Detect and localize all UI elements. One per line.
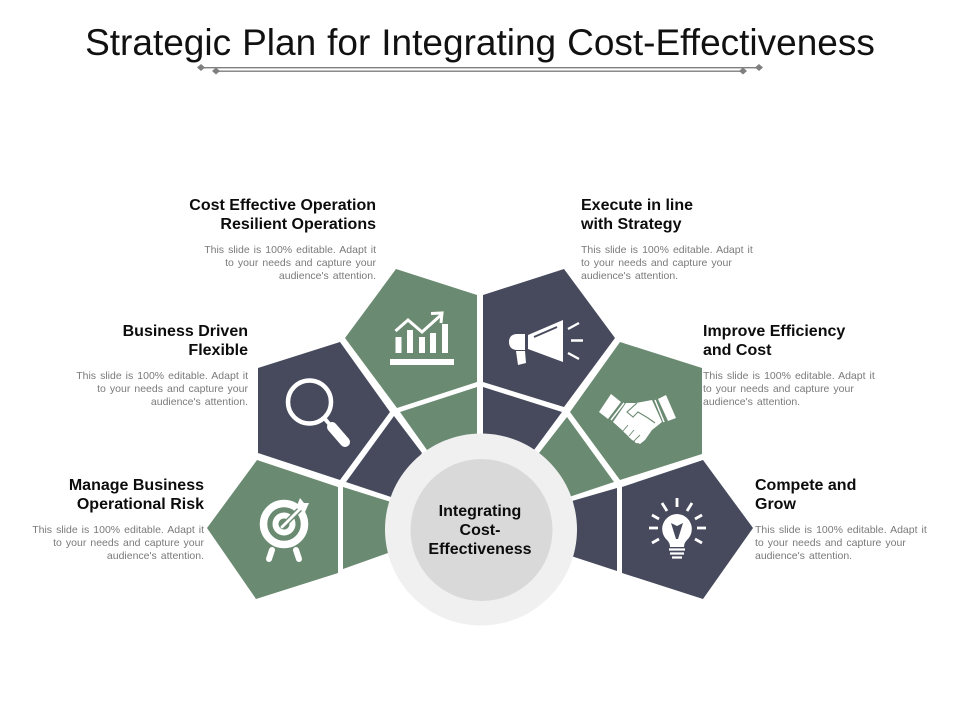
center label: Effectiveness (428, 541, 532, 558)
heading: cost effective operation: Cost Effective Operation (189, 197, 376, 214)
title underline ornament (197, 64, 763, 74)
description: This slide is 100% editable. Adapt it (32, 524, 204, 536)
heading: manage business: Manage Business (69, 477, 204, 494)
description: to your needs and capture your (755, 537, 906, 549)
description: audience's attention. (703, 396, 800, 408)
panel: manage business operational risk (32, 460, 391, 599)
description: This slide is 100% editable. Adapt it (581, 244, 753, 256)
title: Strategic Plan for Integrating Cost-Effectiveness (85, 22, 875, 63)
icon: target (264, 498, 309, 559)
icon: light bulb (649, 498, 706, 558)
description: audience's attention. (755, 550, 852, 562)
description: audience's attention. (151, 396, 248, 408)
heading: business driven: Business Driven (123, 323, 248, 340)
description: to your needs and capture your (53, 537, 204, 549)
heading line 2: Flexible (188, 342, 248, 359)
description: to your needs and capture your (703, 383, 854, 395)
heading: execute in line: Execute in line (581, 197, 693, 214)
description: audience's attention. (279, 270, 376, 282)
description: to your needs and capture your (581, 257, 732, 269)
panel: execute in line with strategy (483, 197, 753, 450)
icon: growth chart (390, 313, 454, 365)
heading line 2: and Cost (703, 342, 772, 359)
segment: green inner (539, 417, 614, 497)
inner circle (410, 459, 552, 601)
panel: cost effective operation (189, 197, 477, 450)
center label: Cost- (460, 522, 500, 539)
segment: dark pentagon (622, 460, 753, 599)
center label: Integrating (439, 503, 521, 520)
segment: dark inner (346, 416, 422, 497)
segment: green inner (400, 387, 477, 450)
panel: compete and grow (565, 460, 927, 599)
segment: green pentagon (570, 342, 702, 480)
icon: magnifier (288, 380, 345, 442)
panel: business driven flexible (76, 323, 422, 497)
segment: dark pentagon (483, 269, 615, 407)
description: This slide is 100% editable. Adapt it (703, 370, 875, 382)
heading line 2: Grow (755, 496, 796, 513)
heading: compete and: Compete and (755, 477, 856, 494)
panel: improve efficiency and cost (539, 323, 875, 497)
segment: dark pentagon (258, 342, 390, 480)
heading line 2: with Strategy (580, 216, 682, 233)
outer ring (385, 434, 577, 626)
icon: megaphone (509, 320, 583, 365)
description: to your needs and capture your (97, 383, 248, 395)
segment: left green pentagon (207, 460, 338, 599)
description: This slide is 100% editable. Adapt it (755, 524, 927, 536)
description: to your needs and capture your (225, 257, 376, 269)
segment: left green inner (343, 487, 391, 569)
description: audience's attention. (581, 270, 678, 282)
description: audience's attention. (107, 550, 204, 562)
segment: dark inner (483, 387, 562, 450)
icon: handshake (599, 394, 676, 444)
description: This slide is 100% editable. Adapt it (204, 244, 376, 256)
heading line 2: Operational Risk (77, 496, 204, 513)
heading: improve efficiency: Improve Efficiency (703, 323, 845, 340)
description: This slide is 100% editable. Adapt it (76, 370, 248, 382)
segment: green pentagon (345, 269, 477, 408)
segment: dark inner (565, 488, 617, 571)
heading line 2: Resilient Operations (220, 216, 376, 233)
